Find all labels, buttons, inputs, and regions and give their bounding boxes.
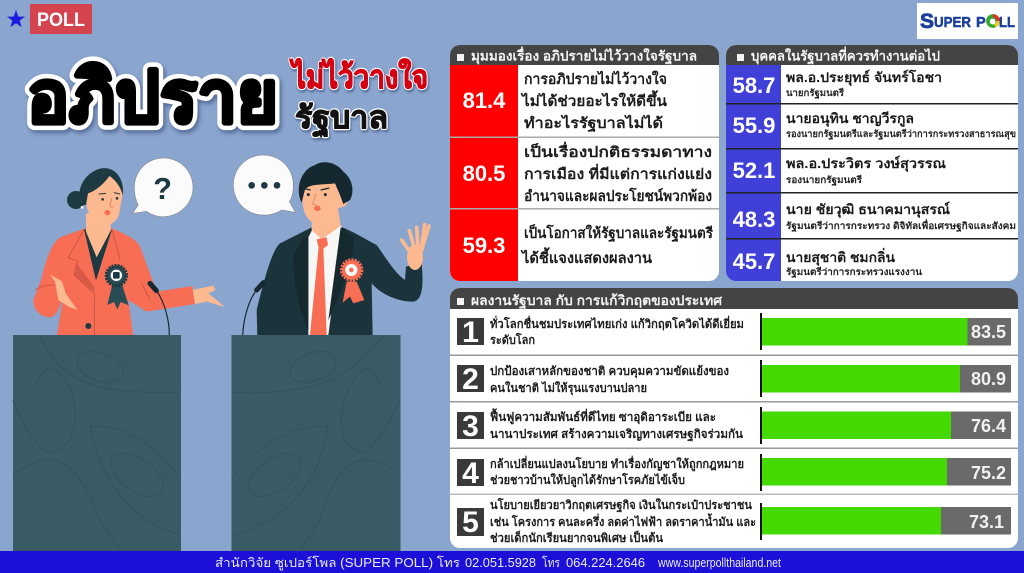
row 3: นานาประเทศ สร้างความเจริญทางเศรษฐกิจร่วมกัน <box>490 427 744 442</box>
row 1 <box>457 313 1011 350</box>
title: อภิปราย <box>27 58 278 138</box>
row 48.3: 48.3 <box>733 207 775 232</box>
row 58.7 <box>733 68 942 99</box>
icon: speech bubble question: ? <box>153 172 172 206</box>
row 48.3 <box>733 201 1016 232</box>
row 45.7: รัฐมนตรีว่าการกระทรวงแรงงาน <box>786 266 923 278</box>
row 3: ฟื้นฟูความสัมพันธ์ที่ดีไทย ซาอุดิอาระเบีย และ <box>490 408 716 425</box>
row 52.1: พล.อ.ประวิตร วงษ์สุวรรณ <box>786 155 947 172</box>
row 5: 73.1 <box>969 512 1004 532</box>
row 4: ช่วยชาวบ้านให้ปลูกได้รักษาโรคภัยไข้เจ็บ <box>490 472 685 488</box>
row 45.7: 45.7 <box>733 249 775 274</box>
row 55.9: รองนายกรัฐมนตรีและรัฐมนตรีว่าการกระทรวงสาธารณสุข <box>786 128 1016 140</box>
row 1: ระดับโลก <box>490 332 535 347</box>
row 80.5 <box>463 141 712 205</box>
icon: speech bubble dots <box>233 155 295 215</box>
row 2: 2 <box>462 363 479 396</box>
row 5: นโยบายเยียวยาวิกฤตเศรษฐกิจ เงินในกระเป๋าประชาชน <box>490 497 753 513</box>
row 80.5: การเมือง ที่มีแต่การแก่งแย่ง <box>524 163 712 183</box>
row 45.7 <box>733 247 923 278</box>
row 48.3: นาย ชัยวุฒิ ธนาคมานุสรณ์ <box>786 201 950 218</box>
man speaker <box>257 162 429 337</box>
footer contact bar: สำนักวิจัย ซูเปอร์โพล (SUPER POLL) โทร <box>215 555 460 571</box>
title: รัฐบาล <box>295 100 388 138</box>
illustration: debate <box>13 155 429 551</box>
podium left <box>13 335 181 551</box>
row 52.1 <box>733 155 947 186</box>
panel header: บุคคลในรัฐบาลที่ควรทำงานต่อไป <box>751 46 940 66</box>
row 59.3: 59.3 <box>463 233 505 258</box>
title: ไม่ไว้วางใจ <box>289 58 428 95</box>
row 59.3: เป็นโอกาสให้รัฐบาลและรัฐมนตรี <box>524 223 713 243</box>
podium right <box>232 335 400 551</box>
row 58.7: 58.7 <box>733 73 775 98</box>
footer contact bar: 02.051.5928 <box>465 556 536 570</box>
woman speaker <box>33 168 225 337</box>
row 55.9: 55.9 <box>733 113 775 138</box>
panel header: ผลงานรัฐบาล กับ การแก้วิกฤตของประเทศ <box>471 293 722 310</box>
row 59.3: ได้ชี้แจงแสดงผลงาน <box>520 247 652 267</box>
row 4: กล้าเปลี่ยนแปลงนโยบาย ทำเรื่องกัญชาให้ถูกกฎหมาย <box>490 455 744 472</box>
row 4: 75.2 <box>971 463 1006 483</box>
row 2: 80.9 <box>971 369 1006 389</box>
title: อภิปราย <box>27 58 278 138</box>
row 2 <box>457 360 1011 397</box>
footer contact bar: 064.224.2646 <box>566 556 645 570</box>
row 58.7: พล.อ.ประยุทธ์ จันทร์โอชา <box>786 68 942 86</box>
footer contact bar <box>0 551 1024 573</box>
row 2: ปกป้องเสาหลักของชาติ ควบคุมความขัดแย้งของ <box>490 364 729 379</box>
row 4: 4 <box>462 457 479 490</box>
title: ไม่ไว้วางใจ <box>289 58 428 95</box>
panel: government performance and crisis <box>450 288 1018 548</box>
title <box>27 58 428 138</box>
row 80.5: 80.5 <box>463 161 505 186</box>
row 81.4: ไม่ได้ช่วยอะไรให้ดีขึ้น <box>520 90 667 110</box>
row 52.1: รองนายกรัฐมนตรี <box>786 174 863 186</box>
row 5: 5 <box>462 506 479 539</box>
row 4 <box>457 454 1011 491</box>
logo: super poll <box>917 3 1018 39</box>
footer contact bar: www.superpollthailand.net <box>657 556 781 570</box>
icon: speech bubble question <box>133 158 193 217</box>
panel header <box>450 45 719 66</box>
logo: super poll: UPER <box>934 15 971 31</box>
row 1: 1 <box>462 316 479 349</box>
panel: views on no-confidence debate <box>450 45 719 281</box>
panel header <box>450 288 1018 310</box>
poll badge: POLL <box>37 10 85 31</box>
panel: persons who should stay in government <box>726 45 1018 281</box>
logo: super poll: O <box>987 15 998 31</box>
row 3 <box>457 407 1011 444</box>
row 80.5: อำนาจและผลประโยชน์พวกพ้อง <box>524 187 712 205</box>
row 55.9: นายอนุทิน ชาญวีรกูล <box>786 111 914 127</box>
icon: star <box>7 10 25 27</box>
panel header <box>726 45 1018 66</box>
logo: super poll: LL <box>999 15 1015 31</box>
microphones <box>150 283 263 335</box>
panel header: มุมมองเรื่อง อภิปรายไม่ไว้วางใจรัฐบาล <box>471 46 697 66</box>
title: รัฐบาล <box>295 100 388 138</box>
row 59.3 <box>463 224 713 264</box>
row 1: 83.5 <box>971 322 1006 342</box>
row 3: 3 <box>462 410 479 443</box>
row 55.9 <box>733 111 1016 140</box>
logo: super poll: S <box>920 10 934 33</box>
row 48.3: รัฐมนตรีว่าการกระทรวง ดิจิทัลเพื่อเศรษฐกิจและสังคม <box>786 218 1016 232</box>
row 3: 76.4 <box>971 416 1006 436</box>
row 45.7: นายสุชาติ ชมกลิ่น <box>786 247 896 266</box>
row 5: ช่วยเด็กนักเรียนยากจนพิเศษ เป็นต้น <box>490 530 664 545</box>
logo: super poll: P <box>976 15 986 31</box>
row 52.1: 52.1 <box>733 158 775 183</box>
row 58.7: นายกรัฐมนตรี <box>786 87 845 99</box>
row 80.5: เป็นเรื่องปกติธรรมดาทาง <box>524 141 712 161</box>
poll badge <box>30 4 92 34</box>
row 81.4: 81.4 <box>463 88 506 113</box>
footer contact bar: โทร <box>542 555 560 570</box>
row 81.4: ทำอะไรรัฐบาลไม่ได้ <box>524 114 663 133</box>
row 5 <box>457 497 1011 545</box>
row 81.4: การอภิปรายไม่ไว้วางใจ <box>524 70 667 88</box>
row 81.4 <box>463 70 667 133</box>
row 1: ทั่วโลกชื่นชมประเทศไทยเก่ง แก้วิกฤตโควิดได้ดีเยี่ยม <box>490 315 744 331</box>
row 2: คนในชาติ ไม่ให้รุนแรงบานปลาย <box>490 380 647 396</box>
row 5: เช่น โครงการ คนละครึ่ง ลดค่าไฟฟ้า ลดราคาน้ำมัน และ <box>490 513 756 529</box>
